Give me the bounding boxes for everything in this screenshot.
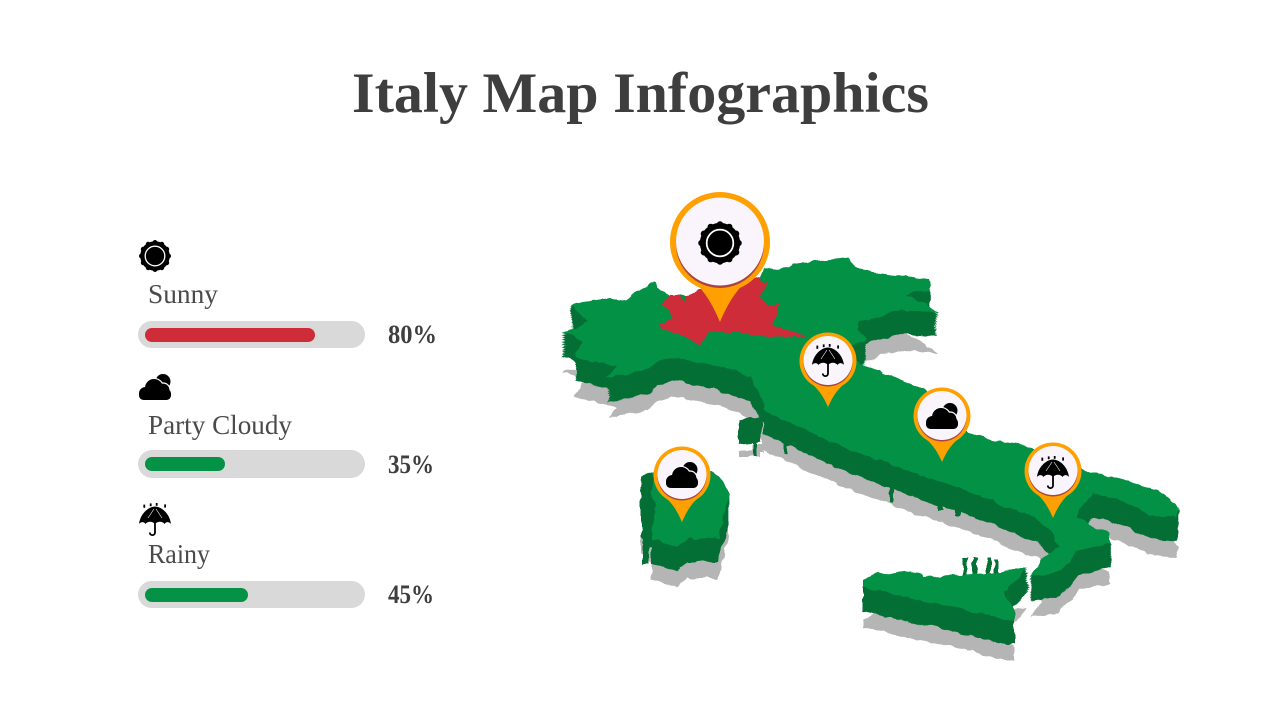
map pin: rainy, central [800, 332, 856, 407]
label: rainy: Rainy [148, 539, 210, 569]
icon: cloud [926, 403, 958, 429]
icon: cloud [139, 374, 171, 400]
progress fill: cloudy 35% [145, 457, 225, 471]
icon: umbrella [812, 344, 844, 376]
legend item: rainy [138, 503, 434, 609]
value: rainy: 45% [388, 580, 434, 609]
map extruded sides [562, 260, 1179, 644]
map shadow [562, 298, 1179, 660]
value: cloudy: 35% [388, 450, 434, 479]
map pin: sunny, large [670, 192, 770, 322]
progress track: sunny [138, 321, 365, 348]
progress track: rainy [138, 581, 365, 608]
highlighted region: Lombardy [660, 277, 807, 346]
map pin: cloudy, central east [914, 388, 970, 462]
progress fill: sunny 80% [145, 328, 315, 342]
icon: sun [698, 221, 742, 265]
progress track: cloudy [138, 450, 365, 478]
title: Italy Map Infographics [352, 62, 929, 125]
map pin: rainy, south [1024, 442, 1082, 518]
panel: weather legend [138, 240, 437, 609]
legend item: sunny [138, 240, 437, 349]
Sardinia west side [641, 472, 656, 530]
map top surface [562, 258, 1179, 620]
icon: umbrella [139, 503, 171, 535]
icon: cloud [666, 462, 698, 488]
legend item: partly cloudy [138, 374, 434, 479]
map of Italy [562, 258, 1179, 660]
progress fill: rainy 45% [145, 588, 248, 602]
icon: umbrella [1037, 456, 1069, 488]
label: party cloudy: Party Cloudy [148, 410, 292, 440]
value: sunny: 80% [388, 320, 437, 349]
icon: sun [139, 240, 171, 272]
label: sunny: Sunny [148, 279, 218, 309]
map pin: cloudy, Sardinia [654, 446, 710, 522]
